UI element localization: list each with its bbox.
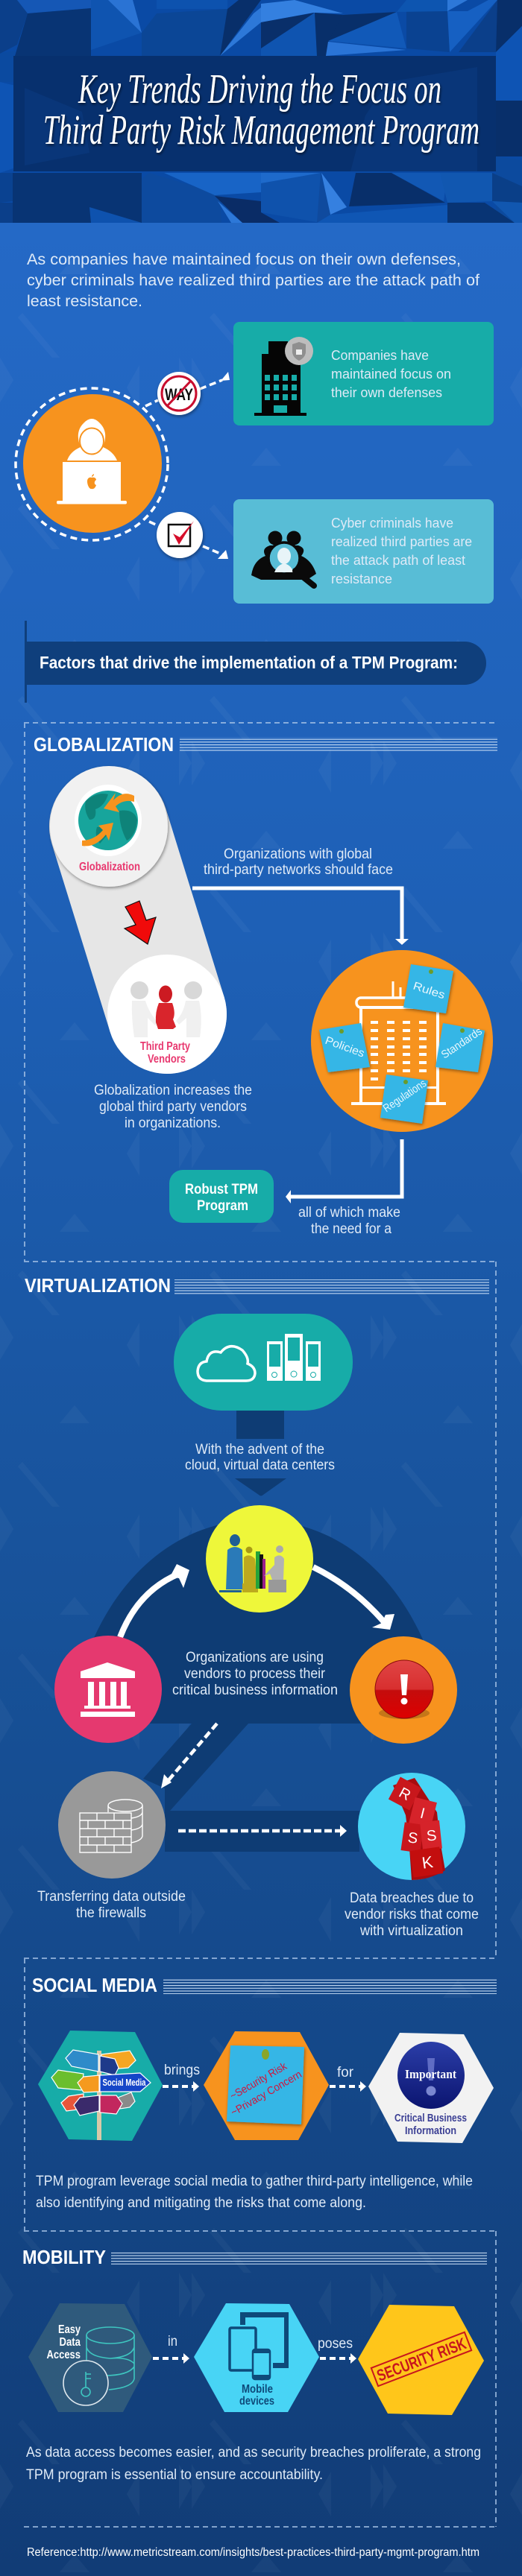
panel: cyber criminals: [233, 499, 494, 604]
heading: globalization: GLOBALIZATION: [34, 733, 174, 756]
text: cyber criminals: [331, 516, 472, 586]
icon: why prohibited badge: [157, 372, 201, 415]
reference: Reference:http://www.metricstream.com/insights/best-practices-third-party-mgmt-program.htm: [27, 2546, 479, 2559]
note: policies: Policies: [324, 1034, 366, 1060]
icon: check badge: [157, 512, 203, 558]
icon: security risk hexagon: [358, 2305, 484, 2415]
icon: important hexagon: Critical Business: [394, 2113, 467, 2124]
note: regulations: Regulations: [381, 1077, 429, 1115]
heading: virtualization: [25, 1274, 489, 1297]
heading: globalization: [34, 733, 497, 756]
text: tpm leverage: TPM program leverage social media to gather third-party intelligence, while: [36, 2174, 473, 2189]
box: robust tpm program: Program: [197, 1198, 248, 1214]
arrow: curved left: [120, 1564, 189, 1637]
intro text: [27, 251, 479, 310]
arrow: dashed right: [178, 1825, 347, 1837]
arrow: hacker to check badge: [149, 522, 228, 559]
note: rules: [403, 964, 453, 1013]
icon: easy data access hexagon: Access: [46, 2349, 81, 2361]
icon: social signpost hexagon: [38, 2031, 163, 2141]
text: organizations with global: [204, 846, 393, 878]
intro text: least resistance.: [27, 293, 142, 310]
text: data access: [26, 2445, 481, 2483]
text: cyber criminals: Cyber criminals have: [331, 516, 453, 531]
arrow: brings: [163, 2081, 199, 2092]
text: organizations using vendors: critical business information: [172, 1683, 338, 1698]
label: third party vendors: [140, 1040, 190, 1066]
text: tpm leverage: also identifying and mitigating the risks that come along.: [36, 2195, 366, 2211]
icon: bank: [54, 1636, 162, 1743]
dashed section borders: [24, 723, 497, 2527]
arrow: to organization: [192, 888, 409, 945]
pill: globalization to vendors: [50, 766, 227, 1074]
note: standards: [435, 1023, 485, 1072]
label: globalization: Globalization: [79, 861, 140, 873]
panel: companies: [233, 322, 494, 425]
text: data breaches: with virtualization: [359, 1923, 463, 1939]
icon: mobile devices hexagon: [194, 2303, 319, 2412]
panel: globalization: [34, 733, 497, 1237]
text: organizations with global: third-party networks should face: [204, 862, 393, 878]
heading: factors bar: Factors that drive the implementation of a TPM Program:: [40, 653, 458, 672]
panel: mobility: [22, 2246, 487, 2483]
icon: risk cubes: S: [426, 1827, 438, 1845]
arrow: in: [153, 2353, 189, 2364]
icon: why prohibited badge: WAY: [165, 385, 193, 404]
text: data access: TPM program is essential to ensure accountability.: [26, 2467, 323, 2483]
text: data breaches: vendor risks that come: [345, 1907, 479, 1922]
heading: mobility: MOBILITY: [22, 2246, 106, 2268]
heading: factors bar: [25, 621, 486, 703]
intro text: cyber criminals have realized third parties are the attack path of: [27, 272, 479, 289]
text: cyber criminals: resistance: [331, 572, 392, 586]
icon: globe: [75, 785, 142, 856]
box: robust tpm program: Robust TPM: [185, 1182, 258, 1197]
arrow: dashed down left: [161, 1724, 217, 1788]
icon: risk cubes: S: [406, 1829, 419, 1847]
banner: [0, 0, 522, 223]
text: globalization increases: Globalization increases the: [94, 1083, 252, 1098]
text: advent of cloud: cloud, virtual data centers: [185, 1458, 335, 1473]
icon: risk cubes: R: [396, 1785, 413, 1804]
icon: social signpost hexagon: Social Media: [103, 2077, 146, 2088]
icon: magnifier over people: [251, 531, 316, 586]
icon: hacker circle: [16, 388, 168, 540]
arrow: hacker to why badge: [145, 372, 230, 406]
panel: social media: [32, 1974, 497, 2211]
intro text: As companies have maintained focus on their own defenses,: [27, 251, 461, 268]
box: robust tpm program: [169, 1170, 274, 1223]
text: data breaches: [345, 1890, 479, 1939]
icon: building with lock: [254, 337, 313, 416]
icon: building with notes: [311, 950, 493, 1132]
arrow: for: [330, 2081, 366, 2092]
text: companies: Companies have: [331, 348, 429, 363]
text: all of which: all of which make: [298, 1205, 400, 1221]
text: transferring data: the firewalls: [76, 1905, 146, 1921]
text: brings: brings: [164, 2063, 200, 2078]
arrow: poses: [320, 2353, 356, 2364]
icon: important hexagon: [368, 2033, 494, 2143]
icon: risk cubes: K: [421, 1852, 435, 1873]
note: standards: Standards: [439, 1025, 485, 1061]
arrow: red: [125, 901, 156, 944]
box: cloud and data centers: [174, 1314, 353, 1411]
title band: [13, 56, 496, 171]
text: organizations using vendors: vendors to process their: [184, 1666, 326, 1682]
text: data access: As data access becomes easier, and as security breaches proliferate, a strong: [26, 2445, 481, 2461]
text: all of which: the need for a: [311, 1221, 392, 1237]
shape: dark dome and path: [93, 1520, 423, 1852]
text: globalization increases: in organizations.: [125, 1115, 221, 1131]
label: third party vendors: Third Party: [140, 1040, 190, 1053]
text: globalization increases: global third party vendors: [99, 1099, 247, 1115]
text: advent of cloud: With the advent of the: [195, 1442, 324, 1458]
text: companies: their own defenses: [331, 385, 442, 400]
icon: important hexagon: Information: [405, 2125, 456, 2137]
text: globalization increases: [94, 1083, 252, 1131]
heading: mobility: [22, 2246, 487, 2268]
icon: third party figures: [130, 981, 202, 1037]
note: policies: [319, 1023, 370, 1072]
panel: virtualization: [25, 1274, 489, 1939]
text: tpm leverage: [36, 2174, 473, 2211]
text: advent of cloud: [185, 1442, 335, 1473]
text: all of which: [298, 1205, 400, 1237]
text: cyber criminals: realized third parties are: [331, 534, 472, 549]
heading: social media: [32, 1974, 497, 1996]
icon: security note hexagon: [204, 2031, 329, 2140]
text: for: for: [337, 2065, 354, 2080]
icon: mobile devices hexagon: devices: [239, 2395, 274, 2408]
arrow: to robust program: [286, 1139, 402, 1203]
icon: easy data access hexagon: Easy: [58, 2323, 81, 2336]
icon: security note hexagon: ~Privacy Concern: [229, 2069, 304, 2118]
icon: firewall: [58, 1771, 166, 1879]
text: organizations using vendors: Organizations are using: [186, 1650, 324, 1665]
shape: connector stem: [235, 1411, 286, 1496]
icon: easy data access hexagon: [28, 2303, 152, 2412]
text: companies: maintained focus on: [331, 367, 451, 382]
title: [43, 66, 479, 154]
icon: risk cubes: [358, 1773, 465, 1880]
note: rules: Rules: [412, 980, 447, 1001]
text: organizations using vendors: [172, 1650, 338, 1698]
text: poses: poses: [318, 2336, 353, 2352]
text: companies: [331, 348, 451, 400]
label: third party vendors: Vendors: [148, 1053, 186, 1066]
text: cyber criminals: the attack path of least: [331, 553, 465, 568]
heading: social media: SOCIAL MEDIA: [32, 1974, 157, 1996]
icon: alert: [350, 1636, 457, 1744]
icon: security note hexagon: ~Security Risk: [228, 2060, 289, 2102]
icon: vendors meeting: [206, 1505, 313, 1613]
text: data breaches: Data breaches due to: [350, 1890, 474, 1906]
icon: risk cubes: I: [418, 1806, 427, 1822]
icon: mobile devices hexagon: Mobile: [242, 2383, 273, 2396]
text: transferring data: Transferring data outside: [37, 1889, 186, 1905]
text: in: in: [168, 2334, 177, 2349]
text: transferring data: [37, 1889, 186, 1921]
text: organizations with global: Organizations with global: [224, 846, 372, 862]
heading: virtualization: VIRTUALIZATION: [25, 1274, 171, 1297]
icon: easy data access hexagon: Data: [60, 2336, 81, 2349]
arrow: curved right: [313, 1567, 394, 1630]
icon: security risk hexagon: SECURITY RISK: [374, 2334, 469, 2385]
note: regulations: [380, 1075, 429, 1124]
icon: important hexagon: Important: [405, 2067, 456, 2081]
